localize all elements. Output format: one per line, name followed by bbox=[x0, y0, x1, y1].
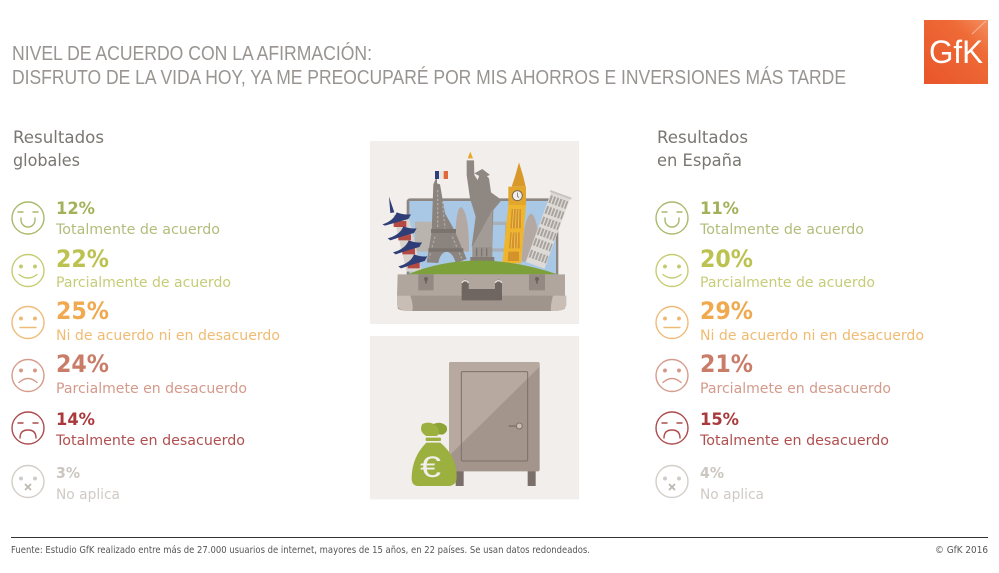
safe bbox=[449, 362, 540, 486]
panel: spain results bbox=[656, 128, 924, 503]
row: totalmente de acuerdo bbox=[12, 199, 220, 238]
suitcase body bbox=[397, 274, 566, 311]
row: ni de acuerdo ni en desacuerdo: 29% bbox=[700, 297, 753, 325]
row: parcialmente de acuerdo bbox=[12, 245, 231, 291]
row: totalmente de acuerdo: 11% bbox=[700, 199, 739, 219]
heading: spain: en España bbox=[657, 151, 742, 171]
row: parcialmente de acuerdo: 22% bbox=[56, 245, 109, 273]
row: totalmente en desacuerdo: Totalmente en desacuerdo bbox=[55, 433, 245, 449]
title: NIVEL DE ACUERDO CON LA AFIRMACIÓN: bbox=[12, 42, 372, 65]
row: totalmente de acuerdo: Totalmente de acuerdo bbox=[699, 222, 864, 238]
logo: GfK: GfK bbox=[929, 34, 983, 70]
big ben bbox=[502, 162, 526, 263]
row: parcialmente en desacuerdo: Parcialmete en desacuerdo bbox=[56, 381, 247, 397]
row: ni de acuerdo ni en desacuerdo bbox=[656, 297, 924, 344]
logo: GfK bbox=[924, 20, 988, 84]
row: no aplica: 3% bbox=[56, 464, 80, 482]
title bbox=[12, 42, 846, 89]
title: DISFRUTO DE LA VIDA HOY, YA ME PREOCUPARÉ POR MIS AHORROS E INVERSIONES MÁS TARDE bbox=[12, 66, 846, 89]
row: ni de acuerdo ni en desacuerdo: 25% bbox=[56, 297, 109, 325]
row: no aplica: No aplica bbox=[700, 487, 764, 503]
row: totalmente en desacuerdo bbox=[656, 410, 889, 449]
row: parcialmente de acuerdo: Parcialmente de acuerdo bbox=[56, 275, 231, 291]
heading: spain bbox=[657, 128, 748, 171]
money bag: € bbox=[420, 451, 441, 484]
row: parcialmente en desacuerdo: 21% bbox=[700, 350, 753, 378]
row: ni de acuerdo ni en desacuerdo bbox=[12, 297, 280, 344]
row: no aplica: 4% bbox=[700, 464, 724, 482]
suitcase lid bbox=[407, 198, 558, 278]
row: totalmente de acuerdo: Totalmente de acuerdo bbox=[55, 222, 220, 238]
money bag bbox=[412, 423, 457, 486]
footer bbox=[11, 537, 988, 556]
illustration: suitcase with world monuments bbox=[370, 141, 579, 324]
row: no aplica bbox=[12, 464, 120, 503]
row: ni de acuerdo ni en desacuerdo: Ni de acuerdo ni en desacuerdo bbox=[56, 328, 280, 344]
row: totalmente de acuerdo: 12% bbox=[56, 199, 95, 219]
footer: Fuente: Estudio GfK realizado entre más de 27.000 usuarios de internet, mayores de 15 años, en 22 países. Se usan datos redondeados. bbox=[11, 545, 590, 556]
tower of pisa bbox=[524, 190, 572, 269]
row: parcialmente de acuerdo: Parcialmente de acuerdo bbox=[700, 275, 875, 291]
row: parcialmente en desacuerdo bbox=[12, 350, 247, 397]
row: no aplica bbox=[656, 464, 764, 503]
row: parcialmente de acuerdo bbox=[656, 245, 875, 291]
row: parcialmente de acuerdo: 20% bbox=[700, 245, 753, 273]
row: ni de acuerdo ni en desacuerdo: Ni de acuerdo ni en desacuerdo bbox=[700, 328, 924, 344]
heading: global: Resultados bbox=[13, 128, 104, 148]
heading: spain: Resultados bbox=[657, 128, 748, 148]
row: parcialmente en desacuerdo: 24% bbox=[56, 350, 109, 378]
row: parcialmente en desacuerdo bbox=[656, 350, 891, 397]
row: totalmente en desacuerdo: 15% bbox=[700, 410, 739, 430]
green hill bbox=[408, 260, 558, 274]
eiffel tower bbox=[427, 171, 467, 263]
heading: global bbox=[13, 128, 104, 171]
pagoda bbox=[382, 197, 427, 272]
row: totalmente en desacuerdo: Totalmente en desacuerdo bbox=[699, 433, 889, 449]
heading: global: globales bbox=[13, 151, 80, 171]
statue of liberty bbox=[467, 152, 502, 261]
row: totalmente en desacuerdo bbox=[12, 410, 245, 449]
footer: © GfK 2016 bbox=[935, 545, 988, 556]
illustration: safe and money bag bbox=[370, 336, 579, 499]
row: no aplica: No aplica bbox=[56, 487, 120, 503]
row: totalmente de acuerdo bbox=[656, 199, 864, 238]
panel: global results bbox=[12, 128, 280, 503]
row: parcialmente en desacuerdo: Parcialmete en desacuerdo bbox=[700, 381, 891, 397]
row: totalmente en desacuerdo: 14% bbox=[56, 410, 95, 430]
